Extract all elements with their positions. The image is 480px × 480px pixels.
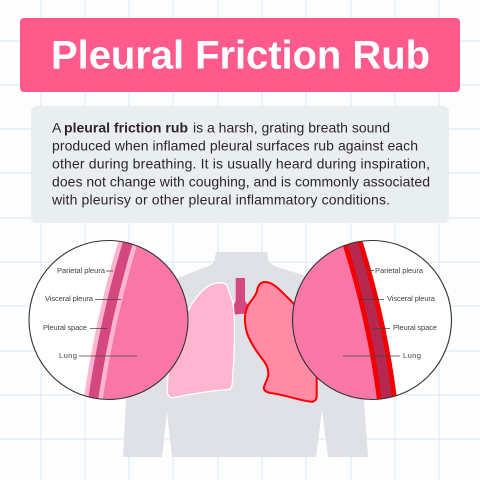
pleural space xyxy=(92,232,131,408)
labels: inflamed pleura: Visceral pleura xyxy=(387,294,436,303)
labels: healthy pleura: Parietal pleura xyxy=(57,266,106,275)
labels: inflamed pleura: Pleural space xyxy=(393,323,437,332)
lung tissue xyxy=(293,246,377,399)
trachea xyxy=(233,278,251,314)
labels: inflamed pleura: Parietal pleura xyxy=(375,266,424,275)
title banner xyxy=(20,18,460,92)
description panel: produced when inflamed pleural surfaces rub against each xyxy=(52,137,418,153)
zoom circle: inflamed pleura xyxy=(292,240,452,400)
description panel: is a harsh, grating breath sound xyxy=(193,119,390,135)
lung tissue xyxy=(103,246,188,399)
labels: inflamed pleura: Lung xyxy=(403,351,421,360)
title banner: Pleural Friction Rub xyxy=(51,34,430,78)
zoom circle: healthy pleura xyxy=(28,240,189,400)
description panel: pleural friction rub xyxy=(64,119,188,135)
labels: inflamed pleura xyxy=(343,266,437,360)
description panel: does not change with coughing, and is commonly associated xyxy=(52,173,430,189)
description panel: with pleurisy or other pleural inflammatory conditions. xyxy=(51,191,390,207)
labels: healthy pleura: Lung xyxy=(59,351,77,360)
labels: healthy pleura xyxy=(43,266,137,360)
left lung: healthy xyxy=(167,283,234,398)
description panel: A xyxy=(52,119,62,135)
right lung: inflamed xyxy=(245,282,317,402)
pleural space xyxy=(349,232,388,408)
labels: healthy pleura: Pleural space xyxy=(43,323,87,332)
description panel: other during breathing. It is usually heard during inspiration, xyxy=(52,155,430,171)
inflamed pleura xyxy=(349,232,388,408)
labels: healthy pleura: Visceral pleura xyxy=(45,294,94,303)
torso silhouette xyxy=(123,252,368,457)
outer and inner pleura xyxy=(92,232,131,408)
description panel xyxy=(31,106,449,223)
